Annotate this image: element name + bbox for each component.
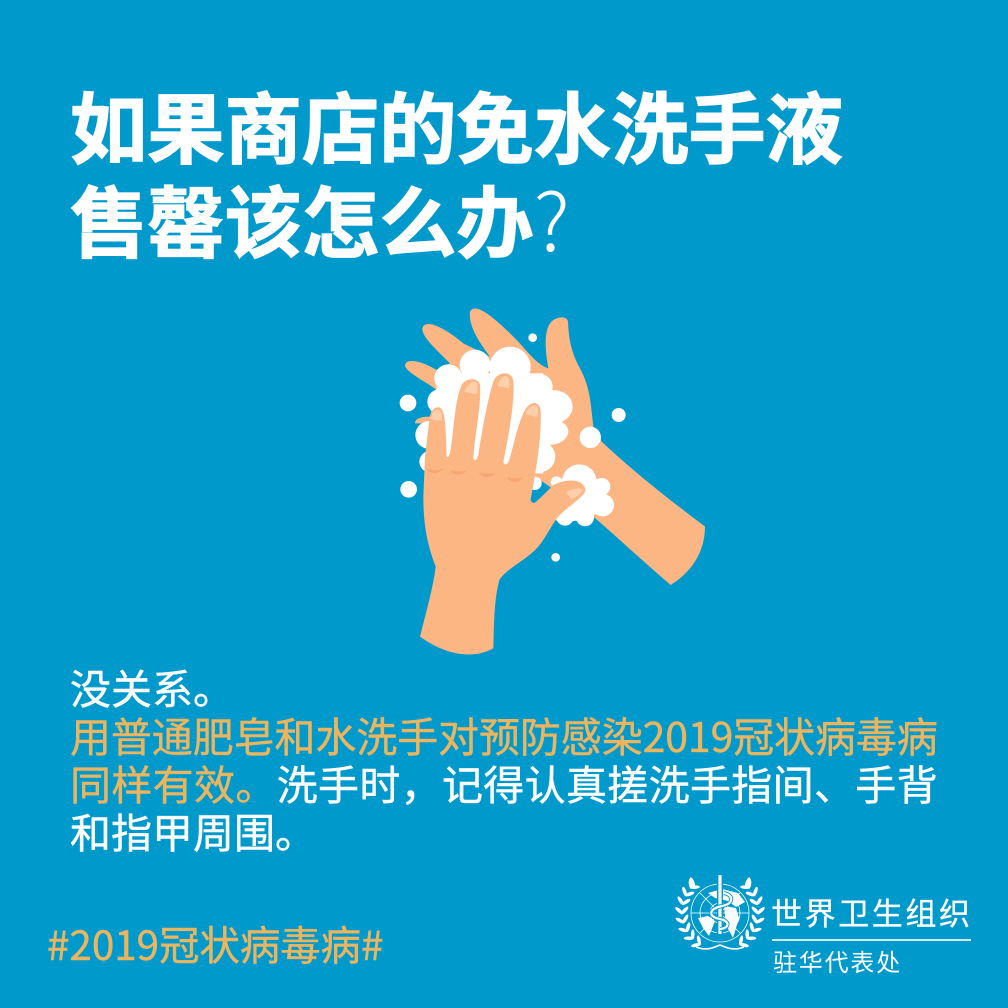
logo divider bbox=[772, 939, 971, 941]
body text: 用普通肥皂和水洗手对预防感染2019冠状病毒病 bbox=[70, 704, 938, 764]
title bbox=[70, 68, 843, 275]
staff and serpent bbox=[711, 875, 731, 934]
soap bubbles bbox=[400, 333, 626, 562]
soap foam on fingers bbox=[415, 347, 573, 490]
illustration: hands washing with soap bbox=[400, 308, 705, 654]
soap foam on thumb bbox=[551, 464, 614, 526]
body text bbox=[70, 656, 938, 860]
body text: 同样有效。洗手时，记得认真搓洗手指间、手背 bbox=[70, 752, 938, 812]
body text: 没关系。 bbox=[70, 656, 234, 716]
logo text: organisation name: 世界卫生组织 bbox=[771, 889, 973, 934]
fingernails bbox=[431, 376, 583, 499]
logo: WHO emblem bbox=[675, 875, 765, 950]
knuckle creases bbox=[427, 469, 523, 482]
wreath bbox=[674, 877, 766, 949]
front hand bbox=[420, 373, 586, 655]
logo text: office: 驻华代表处 bbox=[773, 943, 902, 978]
title: 如果商店的免水洗手液 bbox=[70, 68, 843, 180]
globe bbox=[691, 884, 749, 942]
body text: 和指甲周围。 bbox=[70, 800, 316, 860]
hashtag: #2019冠状病毒病# bbox=[47, 913, 383, 972]
title: 售罄该怎么办? bbox=[70, 159, 570, 275]
back hand and forearm bbox=[405, 308, 705, 585]
